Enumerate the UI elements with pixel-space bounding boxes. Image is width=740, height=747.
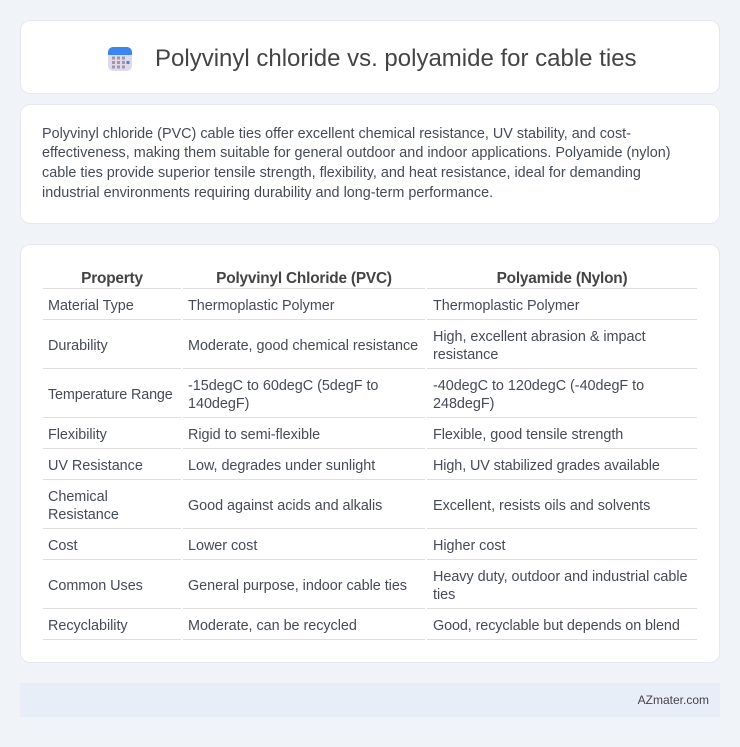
comparison table: Excellent, resists oils and solvents: [433, 498, 650, 514]
comparison table: 140degF): [188, 396, 249, 412]
comparison table: High, UV stabilized grades available: [433, 458, 660, 474]
summary text: [42, 126, 670, 201]
row: recyclability: Recyclability: [48, 618, 128, 634]
summary text: cable ties provide superior tensile strength, flexibility, and heat resistance, ideal for demanding: [42, 165, 641, 181]
summary text: effectiveness, making them suitable for general outdoor and indoor applications. Polyamide (nylon): [42, 145, 670, 161]
comparison table: ties: [433, 587, 455, 603]
comparison table: Thermoplastic Polymer: [433, 298, 580, 314]
row: chemical resistance: [48, 489, 119, 523]
summary text: Polyvinyl chloride (PVC) cable ties offer excellent chemical resistance, UV stability, and cost-: [42, 126, 631, 142]
comparison table: Rigid to semi-flexible: [188, 427, 320, 443]
comparison table: Heavy duty, outdoor and industrial cable: [433, 569, 688, 585]
table header: Polyvinyl Chloride (PVC): [216, 270, 392, 287]
comparison table: Moderate, can be recycled: [188, 618, 357, 634]
row: material type: Material Type: [48, 298, 134, 314]
comparison table: -40degC to 120degC (-40degF to: [433, 378, 644, 394]
row: cost: Cost: [48, 538, 77, 554]
table header: Property: [81, 270, 143, 287]
panel: summary: [20, 104, 720, 224]
comparison table: Moderate, good chemical resistance: [188, 338, 418, 354]
comparison table: Flexible, good tensile strength: [433, 427, 623, 443]
footer bar: [20, 683, 720, 717]
comparison table: Good, recyclable but depends on blend: [433, 618, 680, 634]
comparison table: Thermoplastic Polymer: [188, 298, 335, 314]
row: chemical resistance: Resistance: [48, 507, 119, 523]
panel: title card: [20, 20, 720, 94]
row: durability: Durability: [48, 338, 108, 354]
comparison table: resistance: [433, 347, 498, 363]
row: common uses: Common Uses: [48, 578, 143, 594]
footer credit: AZmater.com: [638, 693, 709, 707]
comparison table: Good against acids and alkalis: [188, 498, 382, 514]
panel: comparison table: [20, 244, 720, 663]
comparison table: Low, degrades under sunlight: [188, 458, 375, 474]
comparison table: High, excellent abrasion & impact: [433, 329, 646, 345]
row: uv resistance: UV Resistance: [48, 458, 143, 474]
row: chemical resistance: Chemical: [48, 489, 108, 505]
comparison table: Higher cost: [433, 538, 505, 554]
row: temperature range: Temperature Range: [48, 387, 173, 403]
comparison table: General purpose, indoor cable ties: [188, 578, 407, 594]
row: flexibility: Flexibility: [48, 427, 107, 443]
title: Polyvinyl chloride vs. polyamide for cable ties: [155, 45, 637, 72]
table header: [81, 270, 627, 287]
comparison table: 248degF): [433, 396, 494, 412]
comparison table: Lower cost: [188, 538, 257, 554]
table header: Polyamide (Nylon): [497, 270, 627, 287]
summary text: industrial environments requiring durability and long-term performance.: [42, 185, 493, 201]
comparison table: -15degC to 60degC (5degF to: [188, 378, 378, 394]
icon: calendar: [108, 47, 132, 71]
